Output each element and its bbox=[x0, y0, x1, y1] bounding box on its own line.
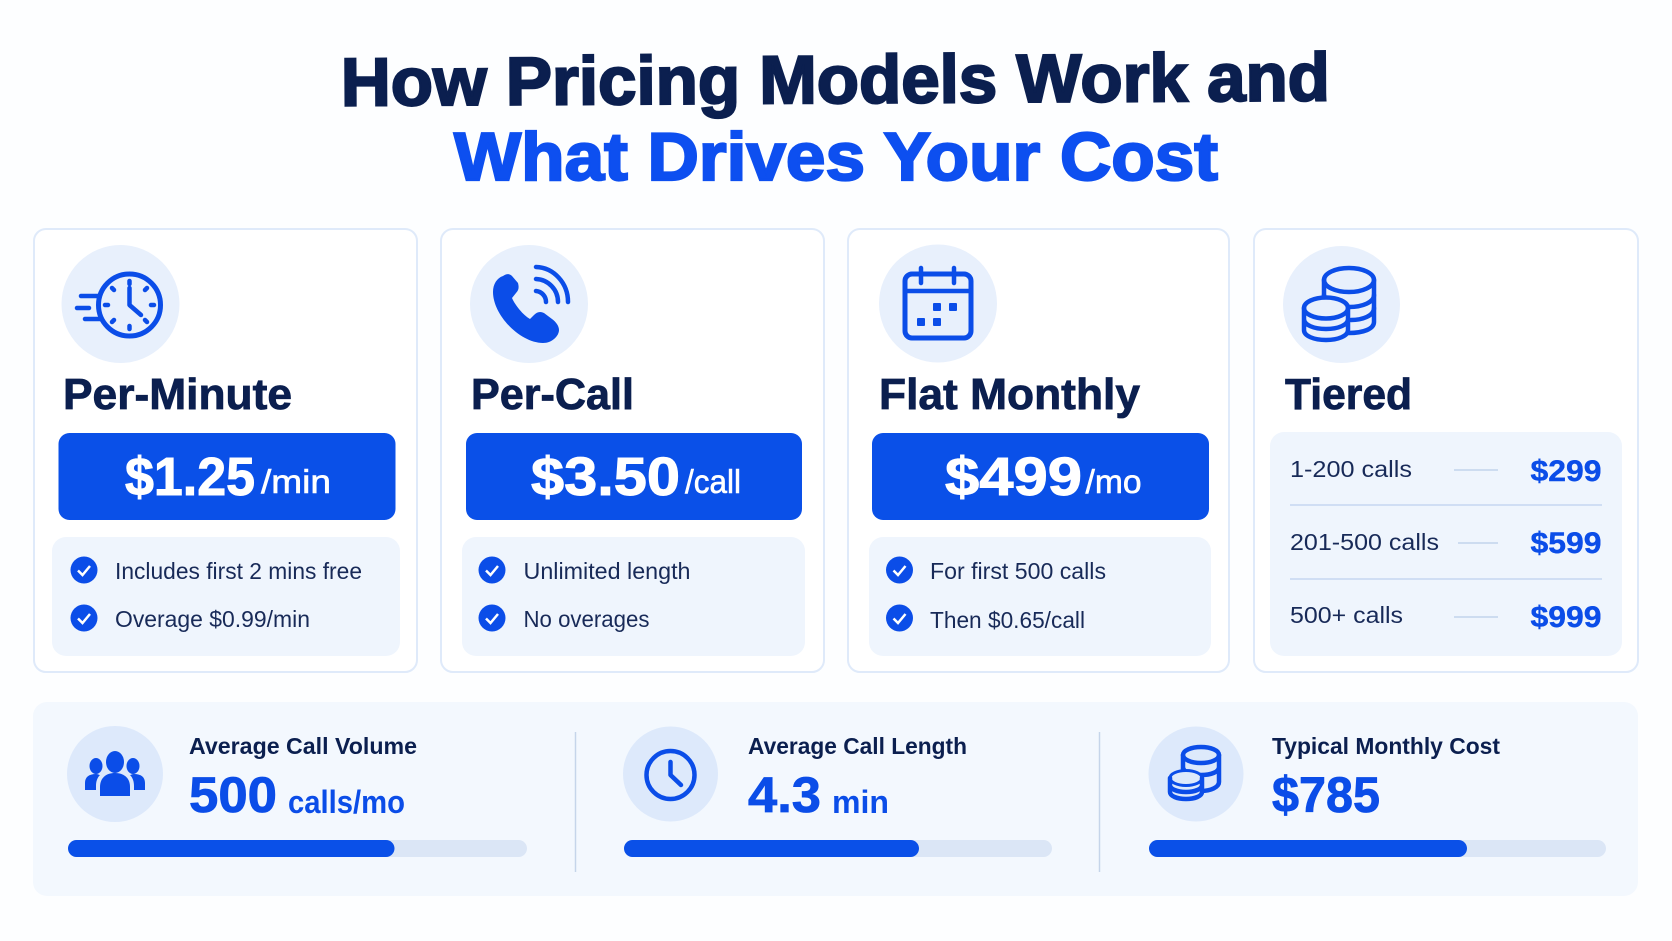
tier row: 201-500 calls: 201-500 calls bbox=[1290, 529, 1439, 555]
icon: phone bbox=[470, 245, 588, 363]
price bar: per-minute: $1.25 bbox=[125, 447, 255, 507]
title bbox=[341, 39, 1330, 195]
price bar: flat monthly: $499 bbox=[945, 447, 1082, 507]
tier row: 500+ calls bbox=[1290, 601, 1602, 634]
progress bar: call length bbox=[624, 840, 1052, 857]
title: What Drives Your Cost bbox=[454, 119, 1218, 195]
value: 4.3 min bbox=[748, 767, 889, 823]
icon: calendar bbox=[879, 244, 997, 362]
label: average call volume: Average Call Volume bbox=[189, 733, 417, 759]
progress bar: monthly cost bbox=[1149, 840, 1606, 857]
price bar: per-call: $3.50 bbox=[531, 447, 680, 507]
feature list: flat monthly: Then $0.65/call bbox=[930, 607, 1085, 633]
icon: clock bbox=[623, 726, 718, 822]
title: How Pricing Models Work and bbox=[341, 39, 1330, 121]
heading: per-minute: Per-Minute bbox=[63, 370, 292, 419]
heading: tiered: Tiered bbox=[1285, 370, 1412, 419]
label: typical monthly cost: Typical Monthly Cost bbox=[1272, 733, 1500, 759]
panel: cost drivers bbox=[33, 702, 1638, 896]
panel: per-minute bbox=[34, 229, 417, 672]
panel: tiered bbox=[1254, 229, 1638, 672]
icon: fast clock bbox=[62, 245, 180, 363]
feature list: per-minute: Includes first 2 mins free bbox=[115, 558, 362, 584]
tier table bbox=[1270, 432, 1622, 656]
value: 4.3 min: 4.3 bbox=[748, 767, 821, 823]
feature list: per-call: No overages bbox=[524, 606, 650, 632]
feature list: per-minute bbox=[52, 537, 400, 656]
price bar: per-call bbox=[466, 433, 802, 520]
stat: average call volume bbox=[67, 726, 527, 857]
price bar: flat monthly: /mo bbox=[1086, 463, 1142, 500]
value: 500 calls/mo: calls/mo bbox=[288, 784, 405, 820]
panel: flat monthly bbox=[848, 229, 1229, 672]
heading: per-call: Per-Call bbox=[471, 370, 634, 419]
price bar: flat monthly bbox=[872, 433, 1209, 520]
tier row: 201-500 calls: $599 bbox=[1530, 527, 1602, 560]
panel: per-call bbox=[441, 229, 824, 672]
feature list: per-call: Unlimited length bbox=[524, 558, 690, 584]
tier row: 500+ calls: 500+ calls bbox=[1290, 602, 1403, 628]
icon: coin stacks bbox=[1283, 246, 1400, 363]
heading: flat monthly: Flat Monthly bbox=[879, 370, 1141, 419]
feature list: flat monthly: For first 500 calls bbox=[930, 558, 1106, 584]
progress bar: call volume bbox=[68, 840, 527, 857]
tier row: 1-200 calls: $299 bbox=[1530, 455, 1602, 488]
icon: coins bbox=[1148, 726, 1244, 822]
tier row: 500+ calls: $999 bbox=[1530, 601, 1602, 634]
icon: people bbox=[67, 726, 163, 822]
value: 500 calls/mo bbox=[189, 767, 405, 823]
price bar: per-call: /call bbox=[685, 463, 741, 500]
stat: typical monthly cost bbox=[1148, 726, 1606, 857]
stat: average call length bbox=[623, 726, 1052, 857]
value: 4.3 min: min bbox=[832, 784, 889, 820]
price bar: per-minute bbox=[58, 433, 396, 520]
feature list: flat monthly bbox=[869, 537, 1211, 656]
label: average call length: Average Call Length bbox=[748, 733, 967, 759]
value: 500 calls/mo: 500 bbox=[189, 767, 277, 823]
tier row: 1-200 calls bbox=[1290, 455, 1602, 488]
feature list: per-call bbox=[462, 537, 805, 656]
tier row: 201-500 calls bbox=[1290, 527, 1602, 560]
tier row: 1-200 calls: 1-200 calls bbox=[1290, 456, 1412, 482]
price bar: per-minute: /min bbox=[261, 463, 331, 500]
value: $785: $785 bbox=[1272, 767, 1380, 823]
feature list: per-minute: Overage $0.99/min bbox=[115, 606, 310, 632]
